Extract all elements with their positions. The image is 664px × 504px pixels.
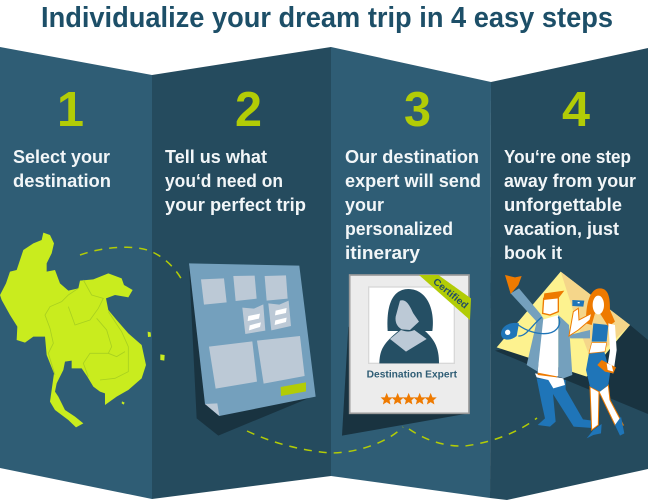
text: step 4: book it (504, 242, 562, 263)
pyramid shadow (495, 325, 648, 414)
panel: step 3 (331, 47, 491, 498)
ribbon label: Certified (430, 276, 470, 311)
text: step 2 (165, 146, 306, 215)
step number 2: 2 (235, 83, 262, 137)
text: step 3: Our destination (345, 146, 479, 167)
text: step 3: expert will send (345, 170, 481, 191)
woman (569, 288, 624, 438)
title: Individualize your dream trip in 4 easy steps (41, 2, 613, 34)
text: step 3: personalized (345, 218, 453, 239)
illustration: travellers at pyramid (495, 272, 648, 438)
ribbon: certified (419, 275, 471, 320)
text: step 4: unforgettable (504, 194, 622, 215)
text: step 3: itinerary (345, 242, 421, 263)
panel: step 2 (152, 47, 331, 499)
sheet shadow (189, 263, 308, 436)
illustration: destination expert card (342, 275, 471, 436)
text: step 1: Select your (13, 146, 110, 167)
icon: map of Southeast Asia (0, 233, 165, 427)
text: step 2: your perfect trip (165, 194, 306, 215)
text: step 4: vacation, just (504, 218, 619, 239)
text: step 4: away from your (504, 170, 636, 191)
text: step 1: destination (13, 170, 111, 191)
text: step 3: your (345, 194, 384, 215)
text: step 2: you‘d need on (165, 170, 283, 191)
card (350, 275, 469, 413)
star rating (381, 393, 437, 405)
dashed route (80, 247, 537, 453)
text: step 3 (345, 146, 481, 263)
man (501, 275, 592, 428)
step number 4: 4 (562, 83, 590, 137)
text: step 2: Tell us what (165, 146, 267, 167)
panel: step 4 (490, 48, 648, 500)
pyramid (497, 272, 630, 377)
text: step 1 (13, 146, 111, 191)
portrait (369, 287, 454, 363)
step number 3: 3 (404, 83, 431, 137)
card label: Destination Expert (367, 369, 458, 380)
card shadow (342, 327, 465, 436)
illustration: itinerary sheet (189, 263, 316, 436)
step number 1: 1 (57, 83, 84, 137)
panel: step 1 (0, 47, 152, 499)
sheet (189, 263, 316, 416)
text: step 4 (504, 146, 636, 263)
text: step 4: You‘re one step (504, 146, 631, 167)
